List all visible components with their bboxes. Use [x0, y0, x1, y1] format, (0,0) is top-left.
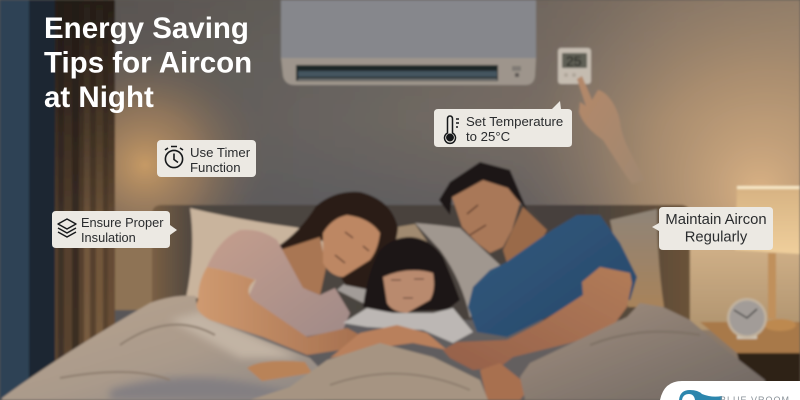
- daughter face: [383, 270, 434, 313]
- table lamp: [735, 186, 800, 331]
- title: Tips for Aircon: [44, 46, 252, 80]
- mother lower hand: [247, 361, 312, 381]
- air conditioner: [281, 0, 536, 85]
- father face: [452, 180, 520, 253]
- father shirt: [468, 215, 637, 337]
- father arm: [443, 267, 632, 370]
- headboard: [152, 205, 690, 320]
- mother hair: [277, 192, 398, 290]
- mother neck and chest: [280, 237, 326, 295]
- left pillow: [186, 208, 345, 300]
- title: Energy Saving: [44, 12, 249, 45]
- blue curtain: [0, 0, 56, 400]
- callout: use timer function: Use Timer: [190, 145, 251, 160]
- callout: use timer function: [157, 140, 256, 177]
- father lower hand: [480, 363, 530, 400]
- callout: ensure proper insulation: Insulation: [81, 230, 136, 245]
- callout: maintain aircon: Maintain Aircon: [665, 212, 767, 228]
- wall thermostat: [558, 48, 591, 84]
- title: at Night: [44, 81, 154, 114]
- callout: set temperature: Set Temperature: [466, 114, 563, 129]
- callout: maintain aircon: [652, 207, 773, 250]
- center pillows: [337, 224, 440, 310]
- left blanket: [2, 296, 350, 400]
- callout: set temperature: [434, 101, 572, 147]
- father hair: [439, 162, 527, 215]
- right blanket: [520, 303, 765, 400]
- callout: ensure proper insulation: [52, 211, 177, 248]
- icon: layers: [58, 219, 76, 237]
- right pillows: [415, 209, 664, 318]
- daughter arms: [330, 325, 447, 358]
- daughter shirt: [343, 308, 473, 343]
- daughter: [330, 237, 473, 358]
- nightstand: [700, 322, 800, 400]
- callout: ensure proper insulation: Ensure Proper: [81, 215, 164, 230]
- callout: use timer function: Function: [190, 160, 241, 175]
- mother: [196, 192, 398, 381]
- center blanket: [250, 343, 488, 400]
- callout: set temperature: to 25°C: [466, 129, 511, 144]
- brown curtain: [55, 0, 152, 400]
- alarm clock: [727, 298, 767, 339]
- logo badge: [660, 381, 800, 400]
- wall thermostat: 25: [566, 53, 582, 69]
- mother arm: [196, 267, 360, 355]
- icon: stopwatch: [165, 146, 183, 168]
- father neck: [503, 207, 547, 263]
- icon: thermometer: [444, 116, 459, 143]
- callout: maintain aircon: Regularly: [685, 230, 748, 246]
- father: [439, 162, 637, 400]
- daughter hair: [363, 237, 460, 312]
- hand pressing thermostat: [577, 76, 645, 184]
- mother face: [323, 215, 380, 277]
- mother shirt: [207, 230, 350, 337]
- icon: logo mark: [679, 390, 722, 400]
